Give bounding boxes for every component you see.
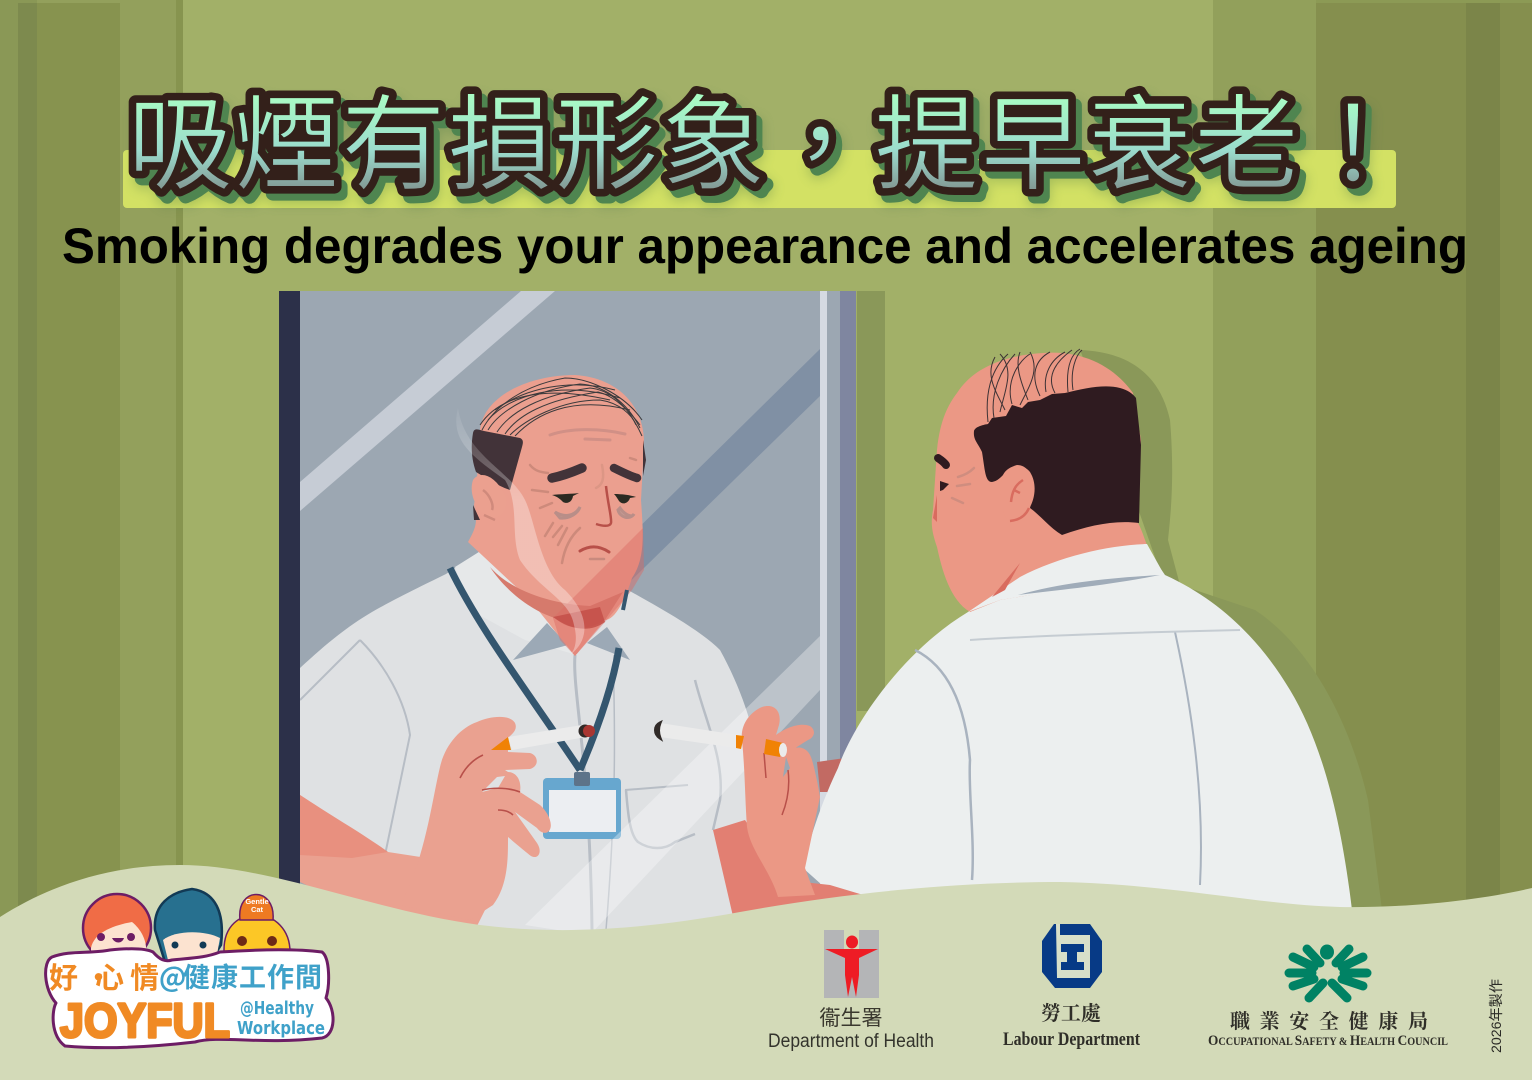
- footer wave: [0, 865, 1532, 1080]
- reflection: cigarette smoke: [456, 408, 584, 655]
- figure: neck and head: [932, 353, 1150, 612]
- figure: cigarette: [656, 723, 787, 757]
- figure: back of shirt: [803, 543, 1352, 910]
- icon: Labour Department emblem: [1042, 924, 1102, 988]
- reflection: neck and head: [468, 375, 644, 656]
- title: Chinese heading with highlight bar: 吸煙有損形象，提早衰老！: [128, 60, 1405, 211]
- logo: Occupational Safety and Health Council: 職業安全健康局: [1230, 1005, 1428, 1034]
- logo: cartoon boy: [155, 889, 222, 962]
- reflection: glass glare: [525, 636, 820, 935]
- title: Chinese heading with highlight bar: 吸煙有損形象，提早衰老！: [128, 60, 1405, 211]
- reflection: shirt seams: [300, 640, 721, 930]
- figure: shirt creases: [915, 630, 1240, 885]
- logo: Department of Health: Department of Health: [768, 1031, 934, 1052]
- title: Chinese heading with highlight bar: 吸煙有損形象，提早衰老！: [134, 67, 1411, 218]
- figure: dark hair: [974, 386, 1141, 535]
- reflection: forearm: [300, 795, 485, 925]
- logo: cartoon girl: [83, 894, 151, 962]
- logo: Occupational Safety and Health Council: OCCUPATIONAL SAFETY & HEALTH COUNCIL: [1208, 1033, 1448, 1049]
- figure: thin hair: [987, 349, 1082, 422]
- logo: Department of Health: [768, 930, 934, 1052]
- wall shadow of mirror: [857, 291, 885, 711]
- reflection: side hair: [472, 429, 523, 490]
- title: Chinese heading with highlight bar: 吸煙有損形象，提早衰老！: [134, 70, 1411, 221]
- reflection: lanyard: [450, 568, 627, 770]
- mirror frame and glass: [279, 291, 856, 931]
- reflection: shirt: [300, 568, 748, 930]
- figure: forearm: [713, 820, 870, 925]
- figure: wall shadow: [1080, 350, 1382, 910]
- reflection: mouth: [580, 547, 609, 552]
- logo: Labour Department: 勞工處: [1041, 997, 1101, 1026]
- reflection: ID badge: [543, 772, 621, 839]
- logo: Joyful @ Healthy Workplace: [46, 889, 333, 1048]
- icon: Department of Health emblem: [824, 930, 879, 998]
- logo: Labour Department: Labour Department: [1003, 1029, 1141, 1050]
- logo: Department of Health: 衞生署: [820, 1002, 882, 1032]
- figure: cuff detail: [817, 758, 845, 792]
- reflection: nose: [596, 486, 611, 526]
- reflection: ear: [472, 475, 499, 501]
- logo: sticker background: [46, 949, 333, 1048]
- reflection: hand: [420, 716, 551, 910]
- logo: Joyful @ Healthy Workplace: Workplace: [237, 1018, 325, 1039]
- figure: ear: [1000, 466, 1035, 522]
- reflection: collar: [455, 552, 479, 568]
- logo: cartoon cat: [224, 894, 290, 962]
- logo: Chinese name: 好·心情: [49, 955, 159, 997]
- logo: Joyful @ Healthy Workplace: @健康工作間: [159, 956, 322, 995]
- reflection: thin hair: [480, 378, 642, 436]
- logo: JOYFUL wordmark: JOYFUL: [60, 995, 230, 1048]
- figure: man from behind: [656, 349, 1382, 925]
- reflection: wrinkles and bags: [555, 507, 580, 518]
- reflection: glass tint on face: [553, 528, 644, 656]
- logo: Occupational Safety and Health Council: [1208, 949, 1448, 1049]
- logo: cartoon cat: Cat: [251, 905, 264, 914]
- figure: nose: [933, 495, 937, 522]
- reflection: eyebrows: [552, 468, 582, 478]
- subtitle: English heading: Smoking degrades your appearance and accelerates ageing: [62, 218, 1468, 274]
- reflection: eyes: [552, 493, 579, 503]
- figure: eyebrow, eye, wrinkles: [938, 458, 946, 465]
- logo: Healthy Workplace wordmark: @Healthy: [240, 998, 314, 1019]
- logo: Labour Department: [1003, 924, 1141, 1050]
- figure: collar: [968, 544, 1166, 612]
- reflection: man in mirror: [300, 375, 820, 940]
- figure: hand holding cigarette: [742, 706, 820, 897]
- production year note: 2026年製作: [1488, 979, 1504, 1053]
- reflection: lit cigarette: [491, 724, 595, 750]
- logo: cartoon cat: Gentle: [245, 897, 269, 906]
- reflection: chin shadow: [490, 567, 623, 628]
- icon: OSHC emblem: [1289, 949, 1367, 998]
